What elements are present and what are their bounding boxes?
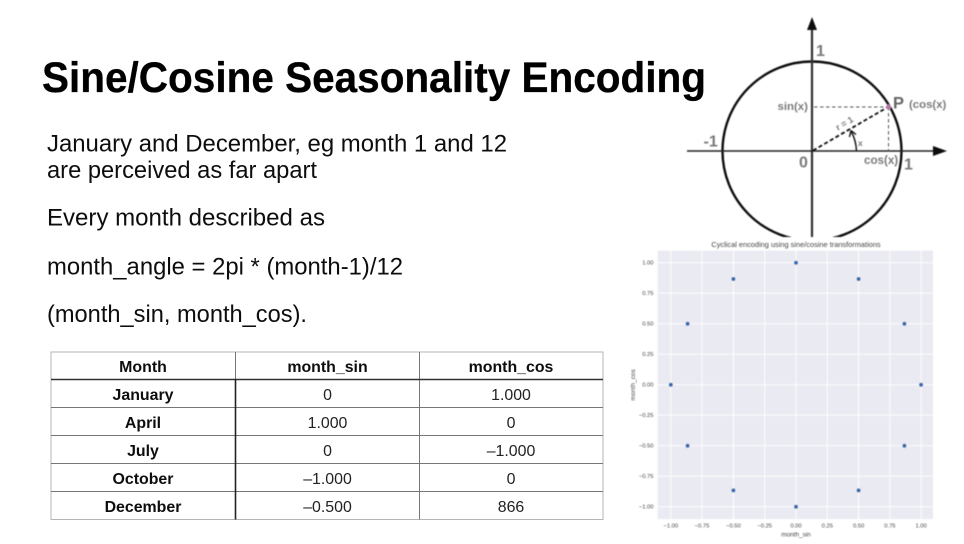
- diagram labels: 1: [816, 43, 825, 60]
- table row labels: December: [105, 499, 181, 516]
- x tick labels: [663, 524, 927, 530]
- table header: month_sin: [287, 359, 368, 376]
- x tick labels: 1.00: [915, 524, 927, 530]
- diagram labels: -1: [704, 134, 718, 150]
- y tick labels: 0.00: [642, 383, 654, 389]
- table values: –1.000: [487, 443, 535, 460]
- angle arrow: [850, 130, 856, 151]
- table values: 0: [507, 415, 516, 432]
- y tick labels: −0.25: [639, 413, 654, 419]
- point P: [886, 104, 891, 110]
- table values: 1.000: [308, 415, 348, 432]
- x tick labels: −1.00: [663, 524, 678, 530]
- diagram labels: 0: [799, 154, 808, 172]
- x tick labels: 0.25: [822, 524, 833, 530]
- text: pair: (month_sin, month_cos).: [47, 301, 307, 328]
- x tick labels: −0.25: [757, 524, 772, 530]
- table row labels: October: [113, 471, 173, 488]
- text: description: Every month described as: [47, 204, 325, 232]
- text: problem statement: are perceived as far apart: [47, 157, 317, 184]
- table values: [303, 387, 535, 516]
- table header: [119, 359, 554, 376]
- y axis label: month_cos: [630, 369, 637, 401]
- x tick labels: 0.50: [853, 524, 864, 530]
- chart title: Cyclical encoding using sine/cosine transformations: [711, 240, 881, 249]
- scatter chart: [630, 240, 933, 538]
- data points: [669, 261, 923, 509]
- unit circle diagram: [687, 17, 947, 240]
- table values: –0.500: [303, 499, 352, 516]
- y tick labels: −0.50: [639, 444, 654, 450]
- x tick labels: 0.00: [790, 524, 802, 530]
- projection lines: [814, 107, 888, 151]
- table values: 0: [323, 387, 332, 404]
- y tick labels: 1.00: [642, 261, 654, 267]
- x axis label: month_sin: [781, 532, 811, 538]
- plot area: [658, 251, 933, 519]
- x tick labels: −0.75: [695, 524, 709, 530]
- table values: 1.000: [491, 387, 531, 404]
- table row labels: January: [113, 387, 174, 404]
- body text: [47, 131, 507, 328]
- diagram labels: P: [893, 94, 904, 112]
- diagram labels: 1: [904, 156, 913, 174]
- table values: –1.000: [303, 471, 352, 488]
- x tick labels: −0.50: [726, 524, 741, 530]
- title: Sine/Cosine Seasonality Encoding: [42, 55, 706, 102]
- y tick labels: 0.25: [642, 352, 654, 358]
- y tick labels: −1.00: [639, 505, 654, 511]
- diagram labels: sin(x): [778, 101, 808, 113]
- y tick labels: 0.75: [642, 291, 654, 297]
- table values: 866: [498, 499, 524, 516]
- text: problem statement: [47, 131, 507, 184]
- table row labels: [105, 387, 181, 516]
- axes: [687, 17, 947, 237]
- diagram labels: [704, 43, 947, 174]
- y tick labels: −0.75: [639, 474, 654, 480]
- x tick labels: 0.75: [884, 524, 896, 530]
- y tick labels: 0.50: [642, 322, 654, 328]
- table header: Month: [119, 359, 167, 376]
- diagram labels: x: [858, 138, 863, 148]
- diagram labels: (cos(x): [909, 99, 947, 111]
- diagram labels: r = 1: [834, 114, 855, 132]
- radius: [813, 107, 888, 150]
- text: formula: month_angle = 2pi * (month-1)/12: [47, 254, 403, 280]
- table header: month_cos: [469, 359, 554, 376]
- table row labels: April: [125, 415, 161, 432]
- table row labels: July: [127, 443, 159, 460]
- circle: [722, 62, 902, 240]
- table: [51, 352, 603, 520]
- text: problem statement: January and December, eg month 1 and 12: [47, 131, 507, 158]
- table values: 0: [323, 443, 332, 460]
- y tick labels: [639, 261, 654, 511]
- diagram labels: cos(x): [864, 154, 898, 167]
- table values: 0: [507, 471, 516, 488]
